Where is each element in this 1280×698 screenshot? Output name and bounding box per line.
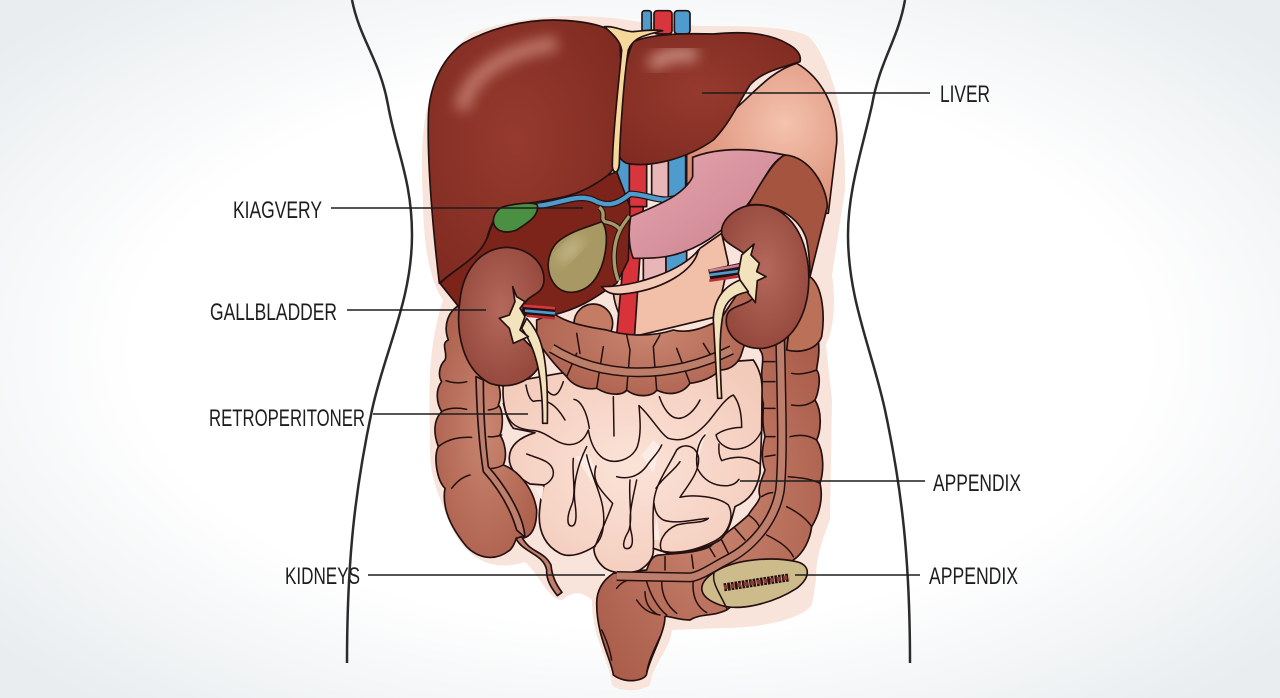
transverse colon <box>537 270 763 396</box>
gallbladder <box>548 207 629 292</box>
ureter left <box>522 318 547 423</box>
small intestine <box>503 360 762 573</box>
ureter right <box>713 280 748 398</box>
curved band under stomach <box>602 250 698 294</box>
liver left lobe <box>618 33 800 164</box>
renal pelvis left <box>499 287 528 343</box>
loop fold lines <box>503 403 640 461</box>
green bile sac <box>493 203 538 232</box>
organs: upper abdomen backing layers <box>613 11 837 353</box>
pale area below stomach <box>613 233 728 337</box>
label: liver: LIVER <box>940 81 990 108</box>
label: appendix lower: APPENDIX <box>929 563 1018 590</box>
small intestine silhouette <box>503 360 762 573</box>
appendix tail <box>516 537 562 596</box>
liver and upper organs <box>428 20 827 423</box>
gaps between loops <box>535 430 707 540</box>
peach halo around organs <box>422 16 845 690</box>
liver underside <box>440 172 630 315</box>
label: kidneys: KIDNEYS <box>285 563 360 590</box>
hepatic duct, blue <box>537 194 673 206</box>
ascending colon and cecum <box>435 303 537 557</box>
colon band, descending <box>617 330 782 577</box>
label: kiagvery: KIAGVERY <box>233 197 322 224</box>
renal vessels left <box>523 306 555 318</box>
liver right lobe <box>428 20 622 283</box>
label: retroperitoner: RETROPERITONER <box>209 405 365 432</box>
label: gallbladder: GALLBLADDER <box>210 299 337 326</box>
label: appendix upper: APPENDIX <box>933 470 1021 497</box>
kidney, image left <box>459 247 555 423</box>
ascending colon, cecum and transverse colon <box>435 270 782 596</box>
upper vessels <box>642 11 690 34</box>
pink stomach <box>629 150 785 258</box>
falciform ligament <box>604 27 663 172</box>
renal vessels right <box>709 265 742 281</box>
central vessels <box>617 153 687 280</box>
renal pelvis right <box>738 244 766 303</box>
olive oval with dark strip <box>702 559 807 608</box>
descending colon, sigmoid and rectum <box>597 330 823 681</box>
spleen <box>748 155 827 277</box>
stomach backing, peach <box>687 63 837 213</box>
colon right end <box>787 277 823 351</box>
aorta <box>615 207 643 353</box>
kidney, image right <box>709 205 809 398</box>
body outline <box>347 0 910 663</box>
